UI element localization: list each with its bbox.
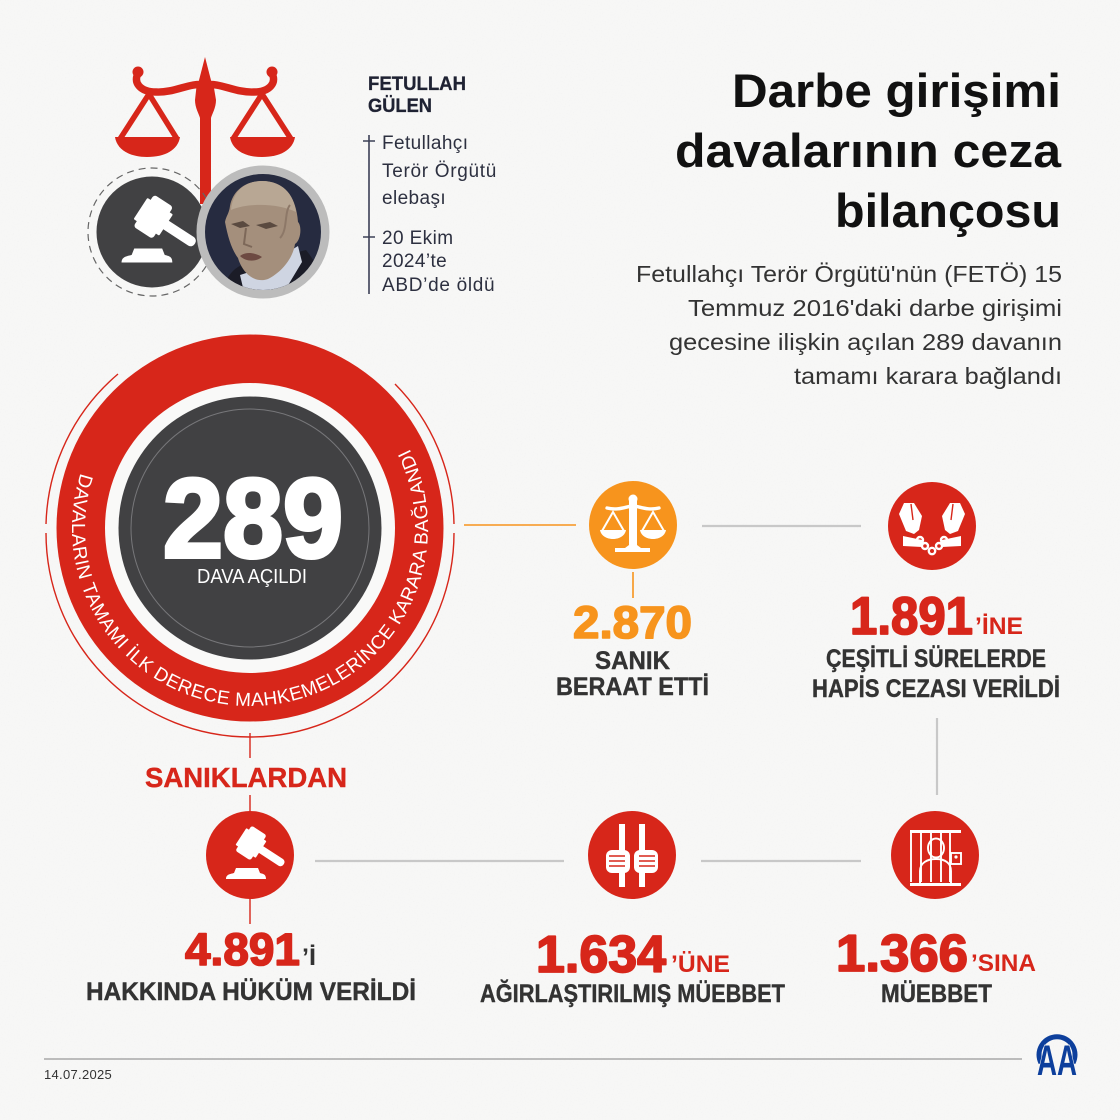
stat: 1.366 life: ’SINA <box>971 950 1036 977</box>
title: Darbe girişimi <box>732 64 1061 117</box>
name: Fetullah Gülen: FETULLAH <box>368 74 466 95</box>
logo: AA <box>1037 1037 1077 1085</box>
stat: 4.891 verdicts: ’İ <box>302 944 316 971</box>
photo: Fetullah Gülen portrait <box>196 166 330 298</box>
connector: badge to verdicts <box>249 733 251 924</box>
icon: dark gavel circle <box>88 168 216 296</box>
stat: 1.891 prison sentences <box>812 587 1060 703</box>
big number 289: 289 <box>163 456 343 581</box>
outer thin arcs <box>46 374 454 737</box>
fact: death date: 2024’te <box>382 251 447 272</box>
stat: 1.366 life: MÜEBBET <box>881 979 992 1008</box>
icon: handcuffed hands <box>888 482 976 570</box>
fact: leader: Fetullahçı <box>382 133 468 154</box>
stat: 4.891 verdicts: 4.891 <box>185 924 300 975</box>
white inner ring <box>105 383 395 673</box>
title: davalarının ceza <box>675 124 1062 177</box>
intro text <box>636 261 1062 389</box>
connector: badge to acquitted icon <box>464 525 633 598</box>
stat: 1.891 prison sentences: 1.891 <box>850 587 973 646</box>
name: Fetullah Gülen: GÜLEN <box>368 96 432 117</box>
logo: AA: AA <box>1037 1037 1077 1085</box>
stat: 1.891 prison sentences: ’İNE <box>975 613 1023 640</box>
title <box>675 64 1062 237</box>
intro text: Temmuz 2016'daki darbe girişimi <box>688 295 1062 321</box>
icon: orange scales <box>589 481 677 569</box>
intro text: tamamı karara bağlandı <box>794 363 1062 389</box>
connector: grey links between stats <box>315 526 937 861</box>
stat: 1.634 aggravated life <box>480 926 785 1008</box>
stat: 1.366 life <box>836 925 1036 1008</box>
stat: 4.891 verdicts <box>86 924 416 1006</box>
stat: 4.891 verdicts: HAKKINDA HÜKÜM VERİLDİ <box>86 977 416 1006</box>
fact: death date: ABD’de öldü <box>382 275 495 296</box>
stat: 1.366 life: 1.366 <box>836 925 968 983</box>
intro text: gecesine ilişkin açılan 289 davanın <box>669 329 1062 355</box>
footer rule <box>44 1058 1022 1060</box>
panel: 289 cases badge <box>45 334 455 738</box>
heading: sanıklardan: SANIKLARDAN <box>145 762 347 793</box>
stat: 2.870 acquitted: SANIK <box>595 647 670 675</box>
stat: 2.870 acquitted: BERAAT ETTİ <box>556 673 709 701</box>
dark centre disc <box>118 396 382 660</box>
timeline rule <box>363 135 375 294</box>
profile: Fetullah Gülen name and facts <box>363 74 497 296</box>
red ring <box>56 334 444 722</box>
title: bilançosu <box>835 184 1061 237</box>
label: dava açıldı: DAVA AÇILDI <box>197 566 307 588</box>
icon: prisoner in cell <box>891 811 979 899</box>
date: 14.07.2025 <box>44 1067 112 1082</box>
stat: 1.634 aggravated life: 1.634 <box>536 926 666 984</box>
icon: red scales of justice <box>115 57 295 204</box>
icon: red gavel <box>206 811 294 899</box>
icon: hands on prison bars <box>588 811 676 899</box>
stat: 1.634 aggravated life: ’ÜNE <box>671 951 730 978</box>
fact: leader: Terör Örgütü <box>382 161 497 182</box>
stat: 1.891 prison sentences: ÇEŞİTLİ SÜRELERDE <box>826 644 1046 673</box>
stat: 2.870 acquitted <box>556 597 709 701</box>
fact: death date: 20 Ekim <box>382 228 453 249</box>
name: Fetullah Gülen <box>368 74 466 117</box>
stat: 1.634 aggravated life: AĞIRLAŞTIRILMIŞ MÜEBBET <box>480 979 785 1008</box>
fact: leader: elebaşı <box>382 188 446 209</box>
intro text: Fetullahçı Terör Örgütü'nün (FETÖ) 15 <box>636 261 1062 287</box>
curved ring text: DAVALARIN TAMAMI İLK DERECE MAHKEMELERİNCE KARARA BAĞLANDI <box>72 450 428 706</box>
stat: 1.891 prison sentences: HAPİS CEZASI VERİLDİ <box>812 675 1060 703</box>
stat: 2.870 acquitted: 2.870 <box>573 597 692 648</box>
